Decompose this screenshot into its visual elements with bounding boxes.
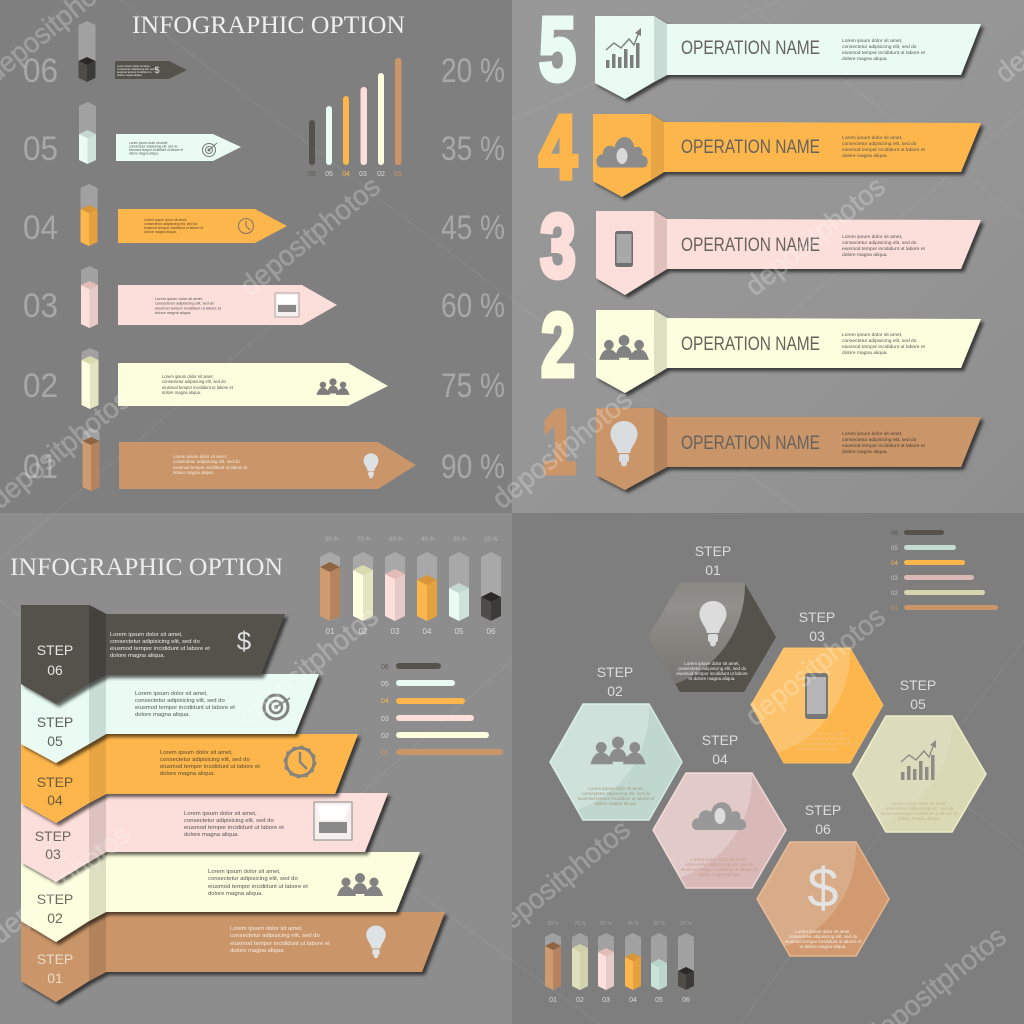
ribbon 5: 5	[539, 0, 576, 100]
percent tubes: 01	[326, 627, 335, 636]
arrow 02: dolore magna aliqua.	[162, 390, 201, 395]
hex step 05	[852, 680, 987, 833]
arrow 04: Lorem ipsum dolor sit amet,	[144, 218, 187, 222]
step 03 ribbon: STEP	[35, 828, 71, 844]
horizontal mini bars: 06	[381, 664, 389, 671]
step 03 ribbon: dolore magna aliqua.	[184, 832, 239, 838]
step 01 ribbon: dolore magna aliqua.	[230, 948, 285, 954]
ribbon 2: dolore magna aliqua.	[842, 350, 888, 356]
step numbers: 06	[23, 52, 58, 90]
step 01 ribbon: eiusmod tempor incididunt ut labore et	[230, 941, 330, 947]
hex step 04: dolore magna aliqua.	[698, 872, 740, 877]
step numbers: 02	[23, 367, 58, 405]
percent tubes: 04	[423, 627, 432, 636]
hex step 04: eiusmod tempor incididunt ut labore et	[681, 867, 758, 872]
hex step 05: eiusmod tempor incididunt ut labore et	[881, 811, 958, 816]
step 06 ribbon	[21, 605, 285, 704]
step 05 ribbon	[21, 662, 319, 763]
hex step 04: STEP	[702, 732, 738, 748]
step 05 ribbon: Lorem ipsum dolor sit amet,	[135, 691, 208, 697]
watermark text: depositphotos	[234, 171, 387, 302]
ribbon 2: eiusmod tempor incididunt ut labore et	[842, 344, 926, 350]
hex step 05: STEP	[900, 677, 936, 693]
hex step 03: eiusmod tempor incididunt ut labore et	[779, 741, 856, 746]
percent tubes: 90 %	[325, 537, 339, 543]
ribbon 2	[541, 296, 981, 396]
step 04 ribbon: consectetur adipisicing elit, sed do	[160, 757, 250, 763]
horizontal mini bars	[381, 663, 503, 757]
step 01 ribbon: 01	[47, 970, 63, 986]
hex step 01: consectetur adipisicing elit, sed do	[678, 666, 747, 671]
hex step 03: Lorem ipsum dolor sit amet,	[789, 731, 845, 736]
step 05 ribbon: eiusmod tempor incididunt ut labore et	[135, 705, 235, 711]
arrow 03	[118, 285, 337, 325]
arrow 04	[118, 209, 287, 243]
ribbon 4: OPERATION NAME	[681, 136, 820, 158]
hex step 05: Lorem ipsum dolor sit amet,	[891, 801, 947, 806]
ribbon 5: consectetur adipisicing elit, sed do	[842, 44, 917, 50]
hex step 02: STEP	[597, 664, 633, 680]
arrow 05: dolore magna aliqua.	[129, 152, 159, 156]
hex step 03	[750, 612, 884, 764]
hex step 04: 04	[712, 751, 728, 767]
ribbon 4: dolore magna aliqua.	[842, 153, 888, 159]
vertical mini bar chart: 05	[325, 171, 333, 178]
hex step 01: STEP	[695, 543, 731, 559]
hex step 04	[652, 736, 787, 889]
ribbon 1: eiusmod tempor incididunt ut labore et	[842, 443, 926, 449]
panel: top-left arrows and tubes	[23, 12, 505, 491]
hex step 05: consectetur adipisicing elit, sed do	[885, 806, 954, 811]
arrow 02: consectetur adipisicing elit, sed do	[162, 379, 226, 384]
ribbon 1: dolore magna aliqua.	[842, 449, 888, 455]
step 04 ribbon: STEP	[37, 774, 73, 790]
step numbers: 04	[23, 209, 58, 247]
panel: top-right operation ribbons	[539, 0, 981, 493]
hex step 03: dolore magna aliqua.	[796, 746, 838, 751]
ribbon 3: eiusmod tempor incididunt ut labore et	[842, 246, 926, 252]
hex step 06: et dolore magna aliqua.	[799, 944, 847, 949]
ribbon 4	[539, 98, 981, 198]
vertical mini bar chart: 01	[394, 171, 402, 178]
step 02 ribbon	[21, 840, 420, 942]
percent tubes	[320, 537, 501, 636]
step 03 ribbon: Lorem ipsum dolor sit amet,	[184, 811, 257, 817]
step 01 ribbon	[21, 900, 445, 1002]
step 02 ribbon: 02	[47, 910, 63, 926]
arrow 03: Lorem ipsum dolor sit amet,	[155, 296, 203, 301]
step 02 ribbon: Lorem ipsum dolor sit amet,	[208, 869, 281, 875]
percent tubes: 20 %	[484, 537, 498, 543]
percent tubes: 05	[455, 627, 464, 636]
arrow 06: eiusmod tempor incididunt ut	[117, 70, 152, 74]
hex step 01: Lorem ipsum dolor sit amet,	[684, 661, 740, 666]
step numbers	[23, 52, 58, 486]
percent labels: 45 %	[441, 209, 505, 247]
ribbon 1: Lorem ipsum dolor sit amet,	[842, 431, 902, 437]
title: INFOGRAPHIC OPTION	[132, 12, 405, 39]
horizontal mini bars	[891, 530, 998, 612]
horizontal mini bars: 03	[891, 576, 898, 582]
arrow 06	[115, 61, 187, 79]
vertical mini bar chart: 06	[308, 171, 316, 178]
horizontal mini bars: 05	[381, 681, 389, 688]
ribbon 3: OPERATION NAME	[681, 234, 820, 256]
step 06 ribbon: dolore magna aliqua.	[110, 653, 165, 659]
percent tubes: 01	[549, 997, 557, 1004]
ribbon 5: eiusmod tempor incididunt ut labore et	[842, 50, 926, 56]
hex step 02	[549, 668, 683, 821]
ribbon 4: Lorem ipsum dolor sit amet,	[842, 135, 902, 141]
ribbon 1: 1	[542, 393, 576, 493]
watermark text: depositphotos	[486, 384, 639, 515]
arrow 01: dolore magna aliqua.	[173, 470, 214, 475]
ribbon 2: consectetur adipisicing elit, sed do	[842, 338, 917, 344]
arrow 01: Lorem ipsum dolor sit amet,	[173, 454, 227, 459]
percent tubes: 02	[359, 627, 368, 636]
step 06 ribbon: eiusmod tempor incididunt ut labore et	[110, 646, 210, 652]
ribbon 4: consectetur adipisicing elit, sed do	[842, 141, 917, 147]
percent labels: 35 %	[441, 130, 505, 168]
hex step 02: dolore magna aliqua.	[595, 801, 637, 806]
hex step 05: 05	[910, 696, 926, 712]
hex step 06: consectetur adipisicing elit, sed do	[789, 934, 858, 939]
horizontal mini bars: 05	[891, 546, 898, 552]
arrow 04: eiusmod tempor incididunt ut labore et	[144, 226, 203, 230]
ribbon 4: eiusmod tempor incididunt ut labore et	[842, 147, 926, 153]
hex step 06: 06	[815, 821, 831, 837]
arrow 03: dolore magna aliqua.	[155, 310, 191, 315]
step 05 ribbon: consectetur adipisicing elit, sed do	[135, 698, 225, 704]
step 05 ribbon: dolore magna aliqua.	[135, 712, 190, 718]
percent labels: 20 %	[441, 52, 505, 90]
horizontal mini bars: 04	[891, 561, 898, 567]
percent labels: 75 %	[441, 367, 505, 405]
ribbon 5: dolore magna aliqua.	[842, 56, 888, 62]
vertical mini bar chart: 04	[342, 171, 350, 178]
percent tubes: 20 %	[680, 921, 692, 927]
horizontal mini bars: 01	[891, 606, 898, 612]
arrow 04: dolore magna aliqua.	[144, 230, 177, 234]
hex step 06: Lorem ipsum dolor sit amet,	[795, 929, 851, 934]
arrow 06: consectetur adipisicing elit, sed do	[117, 67, 158, 71]
percent tubes: 04	[629, 997, 637, 1004]
arrow 05	[116, 134, 241, 161]
hex step 01: 01	[705, 562, 721, 578]
ribbon 3: Lorem ipsum dolor sit amet,	[842, 234, 902, 240]
step 02 ribbon: eiusmod tempor incididunt ut labore et	[208, 884, 308, 890]
horizontal mini bars: 03	[381, 716, 389, 723]
arrow 02: eiusmod tempor incididunt ut labore et	[162, 385, 234, 390]
hex step 02: Lorem ipsum dolor sit amet,	[588, 786, 644, 791]
ribbon 2: Lorem ipsum dolor sit amet,	[842, 332, 902, 338]
percent tubes: 60 %	[389, 537, 403, 543]
hex step 02: 02	[607, 683, 623, 699]
arrow 06: $	[154, 65, 160, 75]
step 04 ribbon	[21, 722, 358, 823]
step 06 ribbon: STEP	[37, 642, 73, 658]
arrow 03: eiusmod tempor incididunt ut labore et	[155, 306, 222, 310]
percent tubes: 35 %	[653, 921, 665, 927]
percent tubes: 75 %	[574, 921, 586, 927]
ribbon 3	[540, 197, 981, 297]
arrow 01: consectetur adipisicing elit, sed do	[173, 459, 240, 464]
ribbon 1	[542, 393, 981, 493]
title: INFOGRAPHIC OPTION	[10, 554, 283, 581]
step 04 ribbon: Lorem ipsum dolor sit amet,	[160, 750, 233, 756]
step 05 ribbon: STEP	[37, 714, 73, 730]
hex step 04: Lorem ipsum dolor sit amet,	[691, 857, 747, 862]
step 01 ribbon: consectetur adipisicing elit, sed do	[230, 933, 320, 939]
horizontal mini bars: 01	[381, 750, 389, 757]
arrow 05: eiusmod tempor incididunt ut labore et	[129, 148, 183, 152]
vertical mini bar chart: 02	[377, 171, 385, 178]
step 01 ribbon: STEP	[37, 951, 73, 967]
percent tubes	[545, 921, 694, 1004]
step 05 ribbon: 05	[47, 733, 63, 749]
panel: bottom-left step ribbons	[10, 537, 503, 1002]
watermark text: depositphotos	[739, 601, 892, 732]
horizontal mini bars: 04	[381, 698, 389, 705]
percent tubes: 90 %	[547, 921, 559, 927]
hex step 01: eiusmod tempor incididunt ut labore	[676, 671, 748, 676]
hex step 04: consectetur adipisicing elit, sed do	[685, 862, 754, 867]
hex step 02: eiusmod tempor incididunt ut labore et	[578, 796, 655, 801]
ribbon 5: Lorem ipsum dolor sit amet,	[842, 38, 902, 44]
percent labels: 60 %	[441, 287, 505, 325]
step 03 ribbon: 03	[45, 846, 61, 862]
percent tubes: 03	[391, 627, 400, 636]
step numbers: 05	[23, 130, 58, 168]
ribbon 3: consectetur adipisicing elit, sed do	[842, 240, 917, 246]
watermark text: depositphotos	[232, 601, 385, 732]
step 01 ribbon: Lorem ipsum dolor sit amet,	[230, 926, 303, 932]
percent tubes: 45 %	[627, 921, 639, 927]
hex step 06: STEP	[805, 802, 841, 818]
panel: bottom-right hexagons	[545, 530, 998, 1002]
step numbers: 01	[23, 448, 58, 486]
arrow 05: Lorem ipsum dolor sit amet,	[129, 141, 168, 145]
hex step 06	[756, 806, 890, 957]
percent tubes: 05	[655, 997, 663, 1004]
arrow 06: Lorem ipsum dolor sit amet,	[117, 64, 150, 68]
step 04 ribbon: dolore magna aliqua.	[160, 771, 215, 777]
tubes column	[78, 21, 100, 491]
arrow 05: consectetur adipisicing elit, sed do	[129, 144, 178, 148]
ribbon 1: consectetur adipisicing elit, sed do	[842, 437, 917, 443]
watermark text: depositphotos	[484, 814, 637, 945]
percent labels: 90 %	[441, 448, 505, 486]
ribbon 5	[539, 0, 981, 100]
step 06 ribbon: 06	[47, 662, 63, 678]
step 03 ribbon: consectetur adipisicing elit, sed do	[184, 818, 274, 824]
percent labels	[441, 52, 505, 486]
arrow 06: dolore magna aliqua.	[117, 73, 142, 77]
arrow 02	[118, 363, 388, 406]
hex step 01: et dolore magna aliqua.	[688, 676, 736, 681]
arrow 01: eiusmod tempor incididunt ut labore et	[173, 465, 248, 470]
hex step 01	[648, 546, 776, 692]
hex step 03: 03	[809, 628, 825, 644]
ribbon 2: OPERATION NAME	[681, 333, 820, 355]
step numbers: 03	[23, 287, 58, 325]
ribbon 1: OPERATION NAME	[681, 432, 820, 454]
step 06 ribbon: $	[237, 626, 252, 656]
hex step 03: consectetur adipisicing elit, sed do	[783, 736, 852, 741]
hex step 02: consectetur adipisicing elit, sed do	[582, 791, 651, 796]
percent tubes: 75 %	[357, 537, 371, 543]
step 02 ribbon: STEP	[37, 891, 73, 907]
percent tubes: 02	[576, 997, 584, 1004]
arrow 01	[119, 442, 416, 489]
hex step 03: STEP	[799, 609, 835, 625]
ribbon 3: dolore magna aliqua.	[842, 252, 888, 258]
hex step 06: $	[807, 856, 839, 919]
arrow 02: Lorem ipsum dolor sit amet,	[162, 374, 214, 379]
percent tubes: 06	[487, 627, 496, 636]
percent tubes: 60 %	[600, 921, 612, 927]
horizontal mini bars: 02	[381, 733, 389, 740]
step 03 ribbon: eiusmod tempor incididunt ut labore et	[184, 825, 284, 831]
hex step 06: eiusmod tempor incididunt ut labore et	[785, 939, 862, 944]
step 02 ribbon: consectetur adipisicing elit, sed do	[208, 876, 298, 882]
percent tubes: 45 %	[421, 537, 435, 543]
hex step 05: dolore magna aliqua.	[898, 816, 940, 821]
horizontal mini bars: 02	[891, 591, 898, 597]
ribbon 2: 2	[541, 296, 575, 396]
watermark text: depositphotos	[739, 171, 892, 302]
step 04 ribbon: 04	[47, 792, 63, 808]
ribbon 4: 4	[539, 98, 577, 198]
arrow 03: consectetur adipisicing elit, sed do	[155, 300, 214, 306]
step 04 ribbon: eiusmod tempor incididunt ut labore et	[160, 764, 260, 770]
vertical mini bar chart	[308, 58, 402, 178]
percent tubes: 06	[682, 997, 690, 1004]
step 06 ribbon: Lorem ipsum dolor sit amet,	[110, 632, 183, 638]
step 03 ribbon	[21, 781, 388, 882]
arrow 04: consectetur adipisicing elit, sed do	[144, 222, 197, 226]
step 06 ribbon: consectetur adipisicing elit, sed do	[110, 639, 200, 645]
step 02 ribbon: dolore magna aliqua.	[208, 891, 263, 897]
ribbon 5: OPERATION NAME	[681, 37, 820, 59]
percent tubes: 35 %	[453, 537, 467, 543]
horizontal mini bars: 06	[891, 531, 898, 537]
vertical mini bar chart: 03	[359, 171, 367, 178]
ribbon 3: 3	[540, 197, 576, 297]
percent tubes: 03	[602, 997, 610, 1004]
